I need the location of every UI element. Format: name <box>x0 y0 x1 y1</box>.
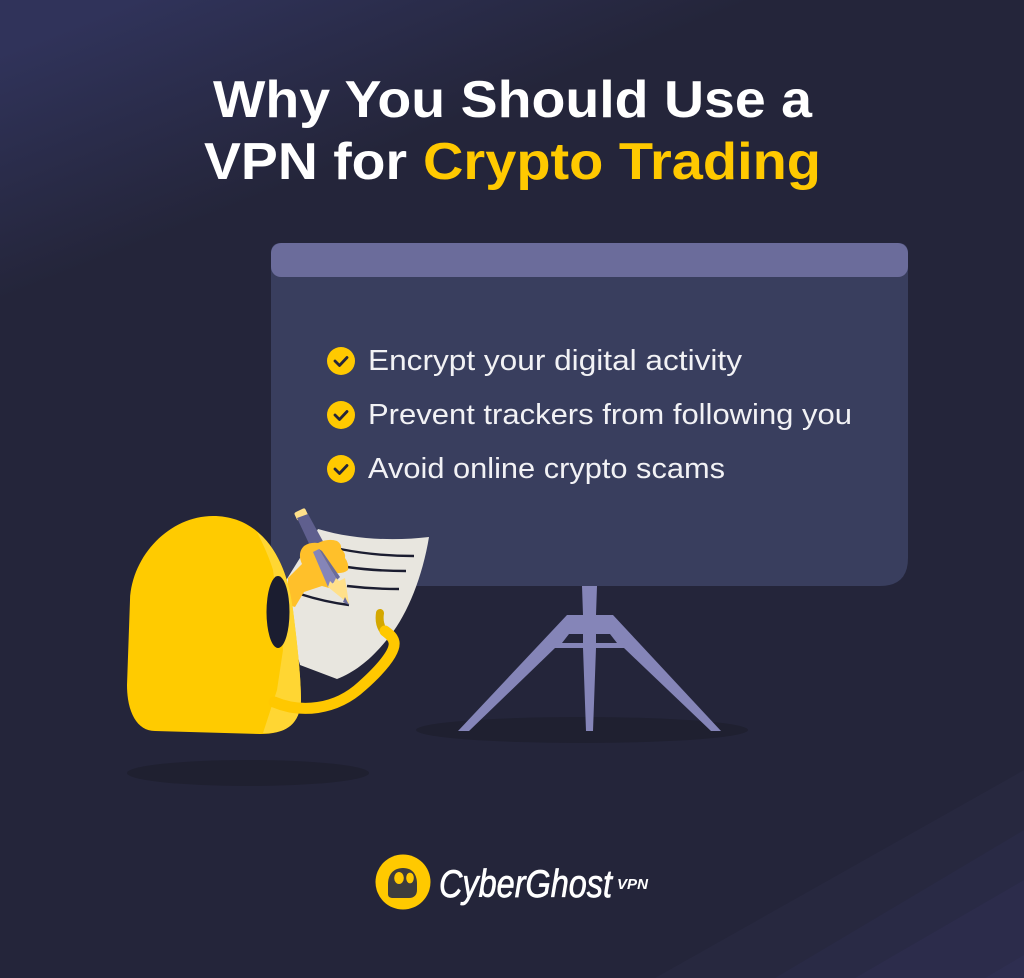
item: trackers: Prevent trackers from following you <box>368 399 852 431</box>
logo wordmark: CyberGhost <box>439 863 614 906</box>
thumb <box>380 613 392 637</box>
paper <box>280 529 429 679</box>
eye hole <box>266 576 290 648</box>
upper arm and hand <box>288 540 348 607</box>
shadow under stand <box>416 717 748 743</box>
body highlight <box>257 532 301 733</box>
shadow under ghost <box>127 760 369 786</box>
title: Why You Should Use a <box>213 71 813 129</box>
presentation stand <box>458 586 721 731</box>
title: Crypto Trading <box>423 133 821 191</box>
item: scams: Avoid online crypto scams <box>368 453 725 485</box>
body <box>127 516 301 734</box>
checklist <box>327 345 852 485</box>
title: VPN for <box>204 133 407 191</box>
logo VPN tag: VPN <box>617 876 649 893</box>
pencil upper section <box>294 508 325 550</box>
paper lines <box>300 549 414 605</box>
item: encrypt: Encrypt your digital activity <box>368 345 743 377</box>
lower arm <box>274 631 394 708</box>
board header bar <box>271 243 908 277</box>
title <box>204 71 821 191</box>
presentation board <box>271 243 908 586</box>
CyberGhost logo <box>376 854 649 910</box>
ghost character with paper and pencil <box>127 508 429 734</box>
pencil lower section <box>313 549 349 605</box>
logo icon <box>376 854 430 910</box>
